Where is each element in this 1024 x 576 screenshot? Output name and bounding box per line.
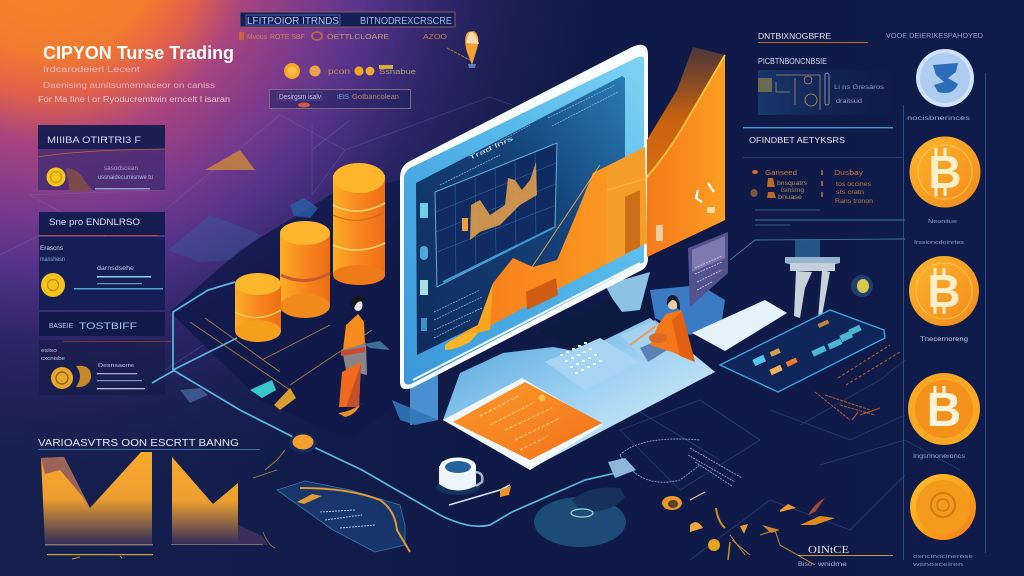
subtitle text block <box>38 65 230 104</box>
icon: blue token <box>916 49 974 107</box>
top tag row: OETTLCLOARE <box>327 32 389 41</box>
icon: machine on pedestal <box>755 210 840 318</box>
panel: right top section: DNTBIXNOGBFRE <box>758 31 831 41</box>
chart: blueprint traces <box>815 345 900 420</box>
panel: right top section: VOOE DEIERIKESPAHOYED <box>886 31 984 40</box>
monitor frame <box>400 45 648 389</box>
panel: right middle section: tos occines <box>836 182 871 188</box>
footer note: OINtCE <box>808 545 849 556</box>
dark tech floor <box>168 180 400 440</box>
panel: left card 2 <box>39 212 165 310</box>
top tag row: ROTE SBF <box>270 32 305 41</box>
panel: left card 3: cxcnisbe <box>41 356 65 362</box>
footer note: Biso <box>798 561 812 568</box>
icon: white arrow on chart <box>696 183 714 202</box>
circuit line <box>152 282 620 526</box>
panel: left card 3: BASEIE <box>49 323 73 330</box>
icon: gold coins <box>51 367 73 389</box>
panel: right middle section: Dusbay <box>834 170 864 177</box>
panel: right middle section: Ganseed <box>765 170 797 177</box>
icon: mug <box>436 458 482 495</box>
coin row <box>284 63 416 79</box>
top tag row: AZOO <box>423 32 447 41</box>
coin row: pcon <box>328 67 350 76</box>
icon: bitcoin coin 1: B <box>928 146 962 198</box>
orange report sheet <box>443 378 603 470</box>
top header bar: LFITPOIOR ITRNDS <box>247 15 339 27</box>
network floor traces <box>190 318 372 478</box>
footer note: osncinocinerose <box>913 554 973 560</box>
white card on desk <box>692 300 787 351</box>
footer note: wnidme <box>817 561 847 568</box>
icon: glowing lamp <box>851 275 873 297</box>
subtitle text block: For Ma fine l or Ryoducremtwin erncelt I isaran <box>38 95 230 104</box>
orange rising chart <box>445 47 725 350</box>
top header bar <box>240 12 455 27</box>
panel: left card 3 <box>39 312 171 395</box>
platform with keyboard <box>443 318 715 469</box>
panel: right top section <box>758 31 984 115</box>
panel: left card 1: sasodscean <box>104 166 138 172</box>
blueprint text block <box>620 439 742 486</box>
icon: pen <box>449 485 511 505</box>
coin label: Ingsnnoneroncs <box>913 454 965 460</box>
coin label: Tnecernoreng <box>920 337 968 343</box>
monitor <box>400 45 648 389</box>
panel: right middle section: bnuase <box>778 195 803 201</box>
person: standing trader <box>338 296 390 417</box>
screen text lines <box>434 85 618 338</box>
person: seated trader <box>630 295 695 362</box>
icon: bitcoin coin 3: B <box>927 384 961 437</box>
heading: bottom left chart: VARIOASVTRS OON ESCRTT BANNG <box>38 437 239 449</box>
top info box: Gotbancolean <box>352 94 399 101</box>
top info box <box>270 90 410 108</box>
icon: bitcoin coin 1 <box>910 136 980 208</box>
panel: right top section: PICBTNBONCNBSIE <box>758 57 827 66</box>
panel: left card 1: MIIIBA OTIRTRI3 F <box>47 135 142 145</box>
icon: lamp <box>447 31 479 68</box>
icon: gold coin <box>46 168 92 192</box>
panel: left card 1 <box>38 125 165 192</box>
keyboard <box>545 338 640 390</box>
decorative isometric tiles <box>0 97 960 560</box>
coin label: Irssioncdoinrtes <box>914 240 964 246</box>
orange floor ornaments <box>662 492 835 565</box>
icon: orange hub node <box>289 433 317 453</box>
panel: left card 2: darnsdsehe <box>97 266 135 272</box>
monitor screen <box>416 76 625 355</box>
flow diagram: draitsud <box>836 99 862 105</box>
icon: glass tablet on floor <box>277 481 410 552</box>
chart axis <box>47 554 153 559</box>
icon: engraved coin <box>910 474 976 540</box>
screen side icons <box>420 203 428 331</box>
panel: right middle section: bnsquatrs <box>777 181 807 187</box>
panel: right middle section: OFINDBET AETYKSRS <box>749 135 845 145</box>
panel: left card 1: ussnaidecurnisnwe tu <box>98 175 153 181</box>
icon: bitcoin coin 2 <box>909 256 979 326</box>
panel: right middle section <box>749 135 873 205</box>
flow diagram: Li ns Gresaros <box>834 84 885 91</box>
right divider line <box>743 73 986 560</box>
coin row: Ssnabue <box>379 69 416 76</box>
icon: gold coin <box>41 273 65 297</box>
tablet panel <box>688 232 728 307</box>
subtitle text block: Daenising aunitsumennaceor on caniss <box>43 81 215 90</box>
blue floor grid lines <box>730 220 905 260</box>
chart: orange cylinder stack small <box>235 273 281 342</box>
chart: orange cylinder stack large <box>333 163 385 285</box>
subtitle text block: Irdcarodeieri Lecent <box>43 65 141 74</box>
coin label <box>914 219 964 246</box>
panel: right middle section: tsinsrng <box>781 188 804 194</box>
monitor: Trad lnrs <box>468 136 514 162</box>
icon: bitcoin coin 3 <box>908 373 980 445</box>
title: CIPYON Turse Trading <box>43 43 234 63</box>
panel: left card 3: esiso <box>41 348 57 354</box>
panel: left card 3: TOSTBIFF <box>79 321 138 331</box>
top tag row <box>239 32 447 41</box>
coin label: nocisbnerinces <box>907 116 970 122</box>
top header bar: BITNODREXCRSCRE <box>360 15 452 27</box>
flow diagram <box>758 70 903 115</box>
app panel <box>720 310 885 392</box>
icon: disc with node <box>534 458 636 547</box>
chart: orange cylinder stack medium <box>280 221 330 318</box>
coin column <box>907 49 980 540</box>
panel: left card 3: Desnsacrre <box>98 363 134 369</box>
chart: M area chart 1 <box>41 452 153 546</box>
top info box: Desirgsm isalv <box>279 94 321 101</box>
panel: left card 2: Sne pro ENDNLRSO <box>49 217 140 227</box>
footer note <box>798 545 973 568</box>
footer note: wsnosceiren <box>911 562 963 568</box>
icon: isometric blocks behind stacks <box>180 150 296 410</box>
monitor stand <box>392 272 725 425</box>
panel: left card 2: manshesn <box>40 257 65 263</box>
icon: bitcoin coin 2: B <box>927 265 961 317</box>
panel: right middle section: Rans tronon <box>835 199 873 205</box>
panel: right middle section: sts cratn <box>836 190 864 196</box>
panel: left card 2: Erascns <box>40 245 64 252</box>
chart: M area chart 2 <box>171 457 275 548</box>
screen chart <box>435 143 557 287</box>
top tag row: Mvous <box>247 32 267 41</box>
coin label: Neonitue <box>928 219 957 225</box>
top info box: IEIS <box>337 92 349 101</box>
